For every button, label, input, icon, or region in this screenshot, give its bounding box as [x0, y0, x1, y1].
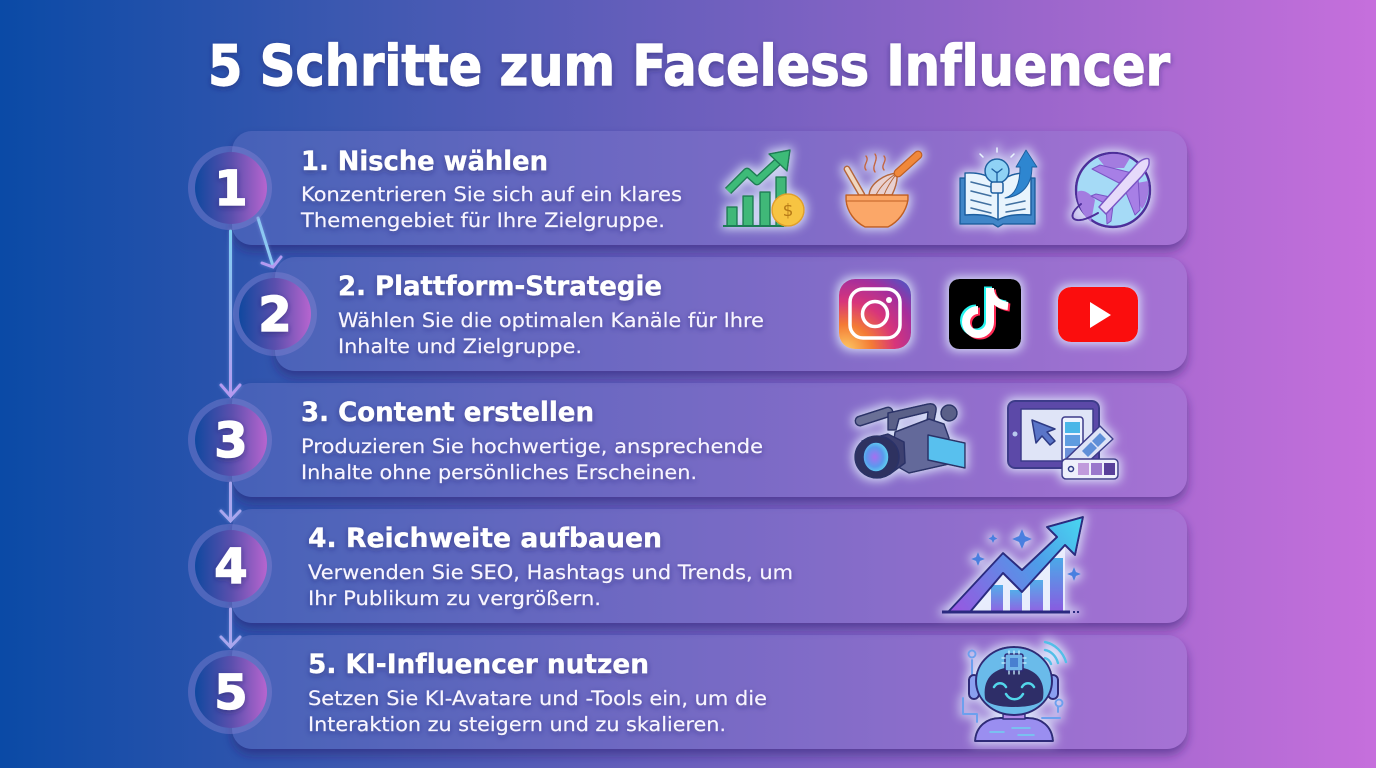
icon: video camera	[855, 404, 965, 478]
step 2 number badge	[233, 272, 317, 356]
step 1 text: Konzentrieren Sie sich auf ein klares	[301, 183, 682, 206]
step 2 number badge: 2	[258, 287, 292, 343]
step 1 number badge: 1	[214, 161, 248, 217]
step 2 text: Inhalte und Zielgruppe.	[338, 335, 582, 358]
panel: step 5 card	[232, 635, 1187, 749]
step 3 text: Inhalte ohne persönliches Erscheinen.	[301, 461, 697, 484]
step 2 text	[338, 271, 764, 358]
step 4 text: 4. Reichweite aufbauen	[308, 523, 662, 554]
arrow: step 1 to step 2	[258, 218, 281, 267]
step 4 text	[308, 523, 793, 610]
step 4 number badge: 4	[214, 539, 248, 595]
icon: tablet and swatches	[1008, 401, 1118, 479]
step 2 text: 2. Plattform-Strategie	[338, 271, 662, 302]
step 2 text: Wählen Sie die optimalen Kanäle für Ihre	[338, 309, 764, 332]
step 5 text: 5. KI-Influencer nutzen	[308, 649, 649, 680]
step 3 text: 3. Content erstellen	[301, 397, 594, 428]
step 1 number badge	[188, 146, 272, 230]
arrow: step 1 to step 3	[221, 231, 240, 396]
icon: TikTok	[949, 279, 1021, 349]
icon: globe and airplane	[1072, 153, 1150, 227]
icon: growth arrow	[942, 517, 1083, 612]
icon: mixing bowl and whisk	[846, 154, 918, 227]
step 3 text	[301, 397, 763, 484]
step 4 text: Ihr Publikum zu vergrößern.	[308, 587, 601, 610]
step 5 text	[308, 649, 767, 736]
panel: step 1 card	[232, 131, 1187, 245]
icon: AI robot	[963, 642, 1066, 741]
step 5 text: Setzen Sie KI-Avatare und -Tools ein, um die	[308, 687, 767, 710]
icon: finance growth chart	[723, 150, 804, 226]
title: 5 Schritte zum Faceless Influencer	[208, 34, 1170, 99]
step 3 number badge: 3	[214, 413, 248, 469]
step 4 number badge	[188, 524, 272, 608]
icon: Instagram	[839, 279, 911, 349]
step 5 number badge: 5	[214, 665, 248, 721]
panel: step 2 card	[275, 257, 1187, 371]
step 4 text: Verwenden Sie SEO, Hashtags und Trends, um	[308, 561, 793, 584]
step 1 text	[300, 146, 682, 232]
step 1 text: Themengebiet für Ihre Zielgruppe.	[300, 209, 665, 232]
icon: book with light bulb	[960, 148, 1037, 227]
arrow: step 4 to step 5	[221, 609, 240, 647]
panel: step 4 card	[232, 509, 1187, 623]
icon: YouTube	[1058, 287, 1138, 342]
panel: step 3 card	[232, 383, 1187, 497]
icon: finance growth chart: $	[783, 201, 793, 221]
step 5 text: Interaktion zu steigern und zu skalieren.	[308, 713, 726, 736]
arrow: step 3 to step 4	[221, 483, 240, 521]
step 5 number badge	[188, 650, 272, 734]
step 1 text: 1. Nische wählen	[301, 146, 548, 177]
step 3 number badge	[188, 398, 272, 482]
step 3 text: Produzieren Sie hochwertige, ansprechende	[301, 435, 763, 458]
